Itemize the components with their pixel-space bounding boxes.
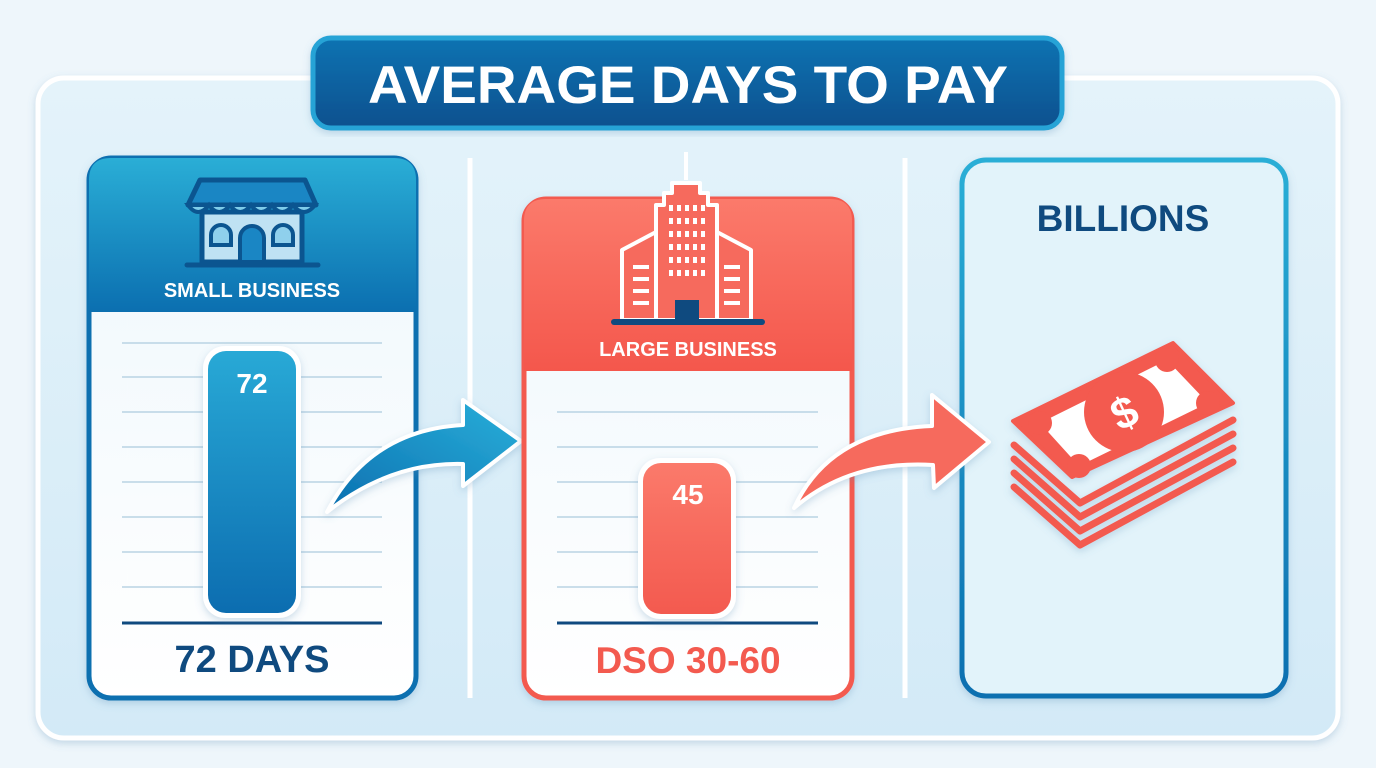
heading: small business: SMALL BUSINESS [164,280,340,302]
icon: store [187,180,318,265]
arrow: red [794,395,989,508]
icon: money stack: $ [1103,386,1146,441]
icon: building [614,152,762,322]
bar chart: 45 [638,458,736,619]
heading: large business: LARGE BUSINESS [599,339,777,361]
panel: large business [524,152,852,698]
title banner: AVERAGE DAYS TO PAY [368,56,1008,115]
panel: billions [962,160,1286,696]
panel: small business [89,158,416,698]
arrow: blue [327,400,521,512]
icon: money stack [1013,343,1233,545]
bar chart: 45: 45 [672,479,704,510]
value: DSO 30-60: DSO 30-60 [595,640,781,681]
bar chart: 72 [203,346,301,618]
bar chart: 72: 72 [236,368,268,399]
heading: billions: BILLIONS [1037,198,1209,239]
title banner [313,38,1062,128]
value: 72 days: 72 DAYS [175,639,329,681]
